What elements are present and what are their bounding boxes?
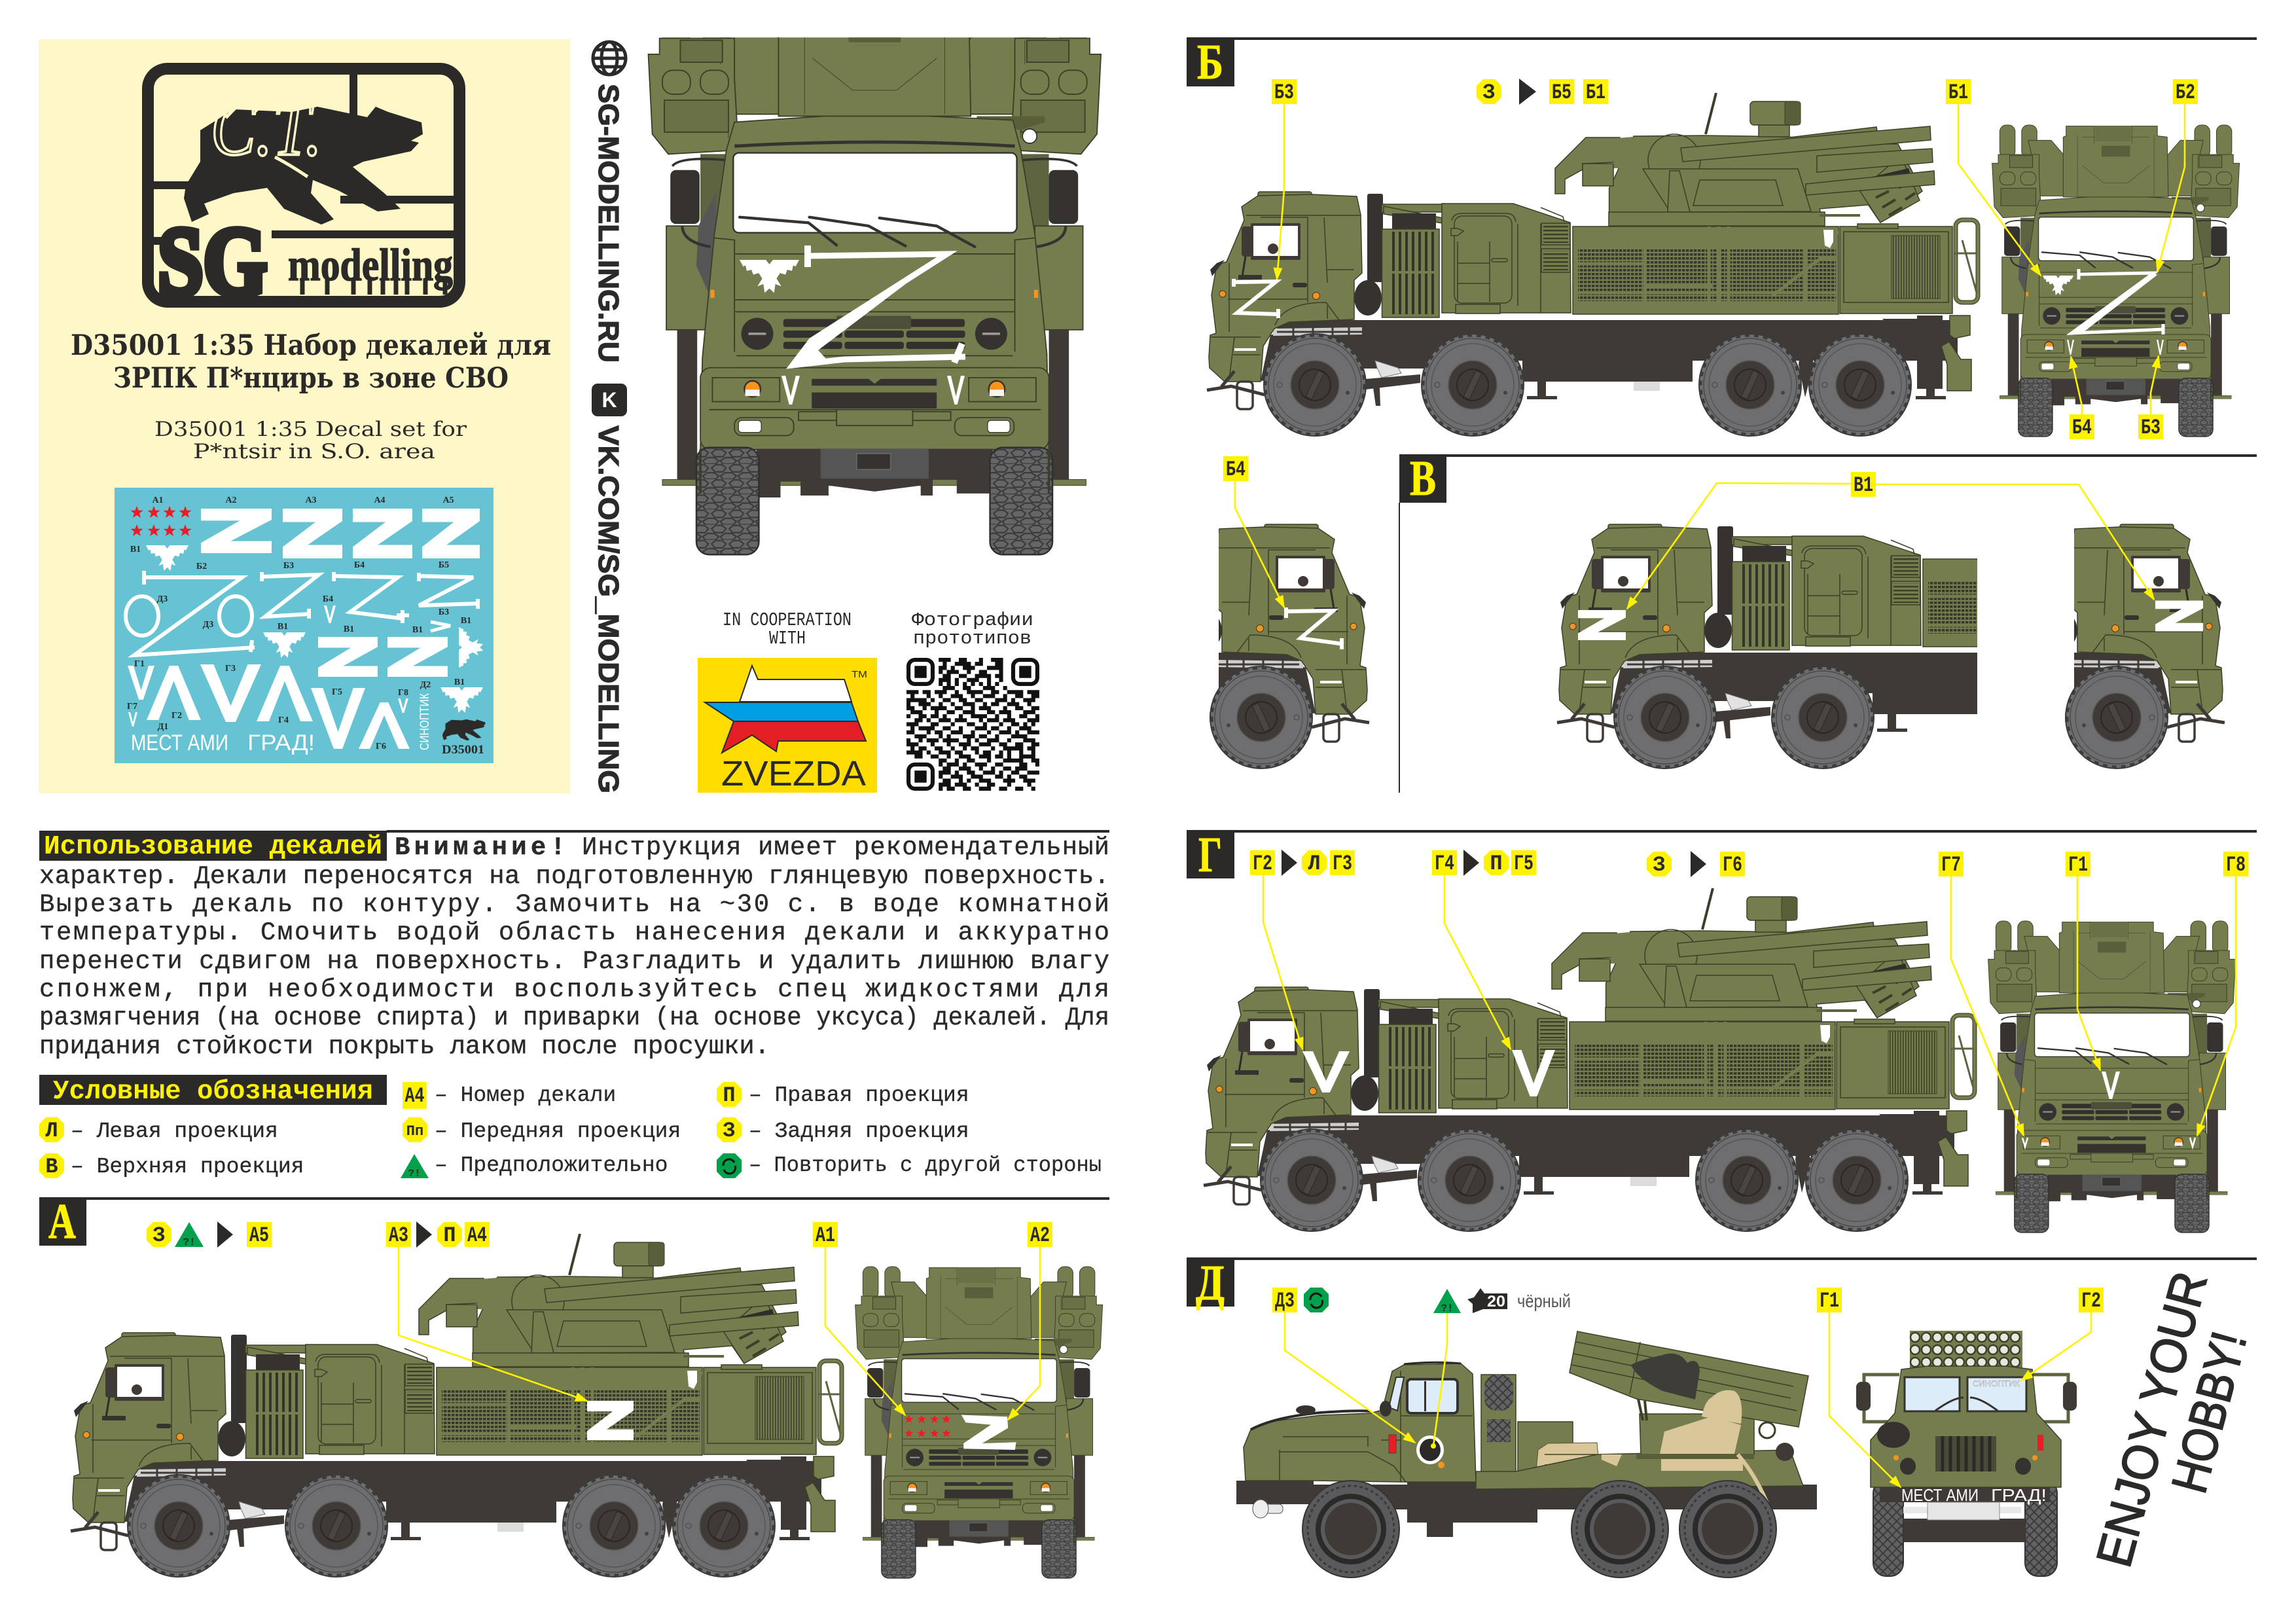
section letter A: А — [48, 1194, 76, 1249]
illustration: cab with В1 decal — [2065, 524, 2225, 769]
callout: A3 arrow — [399, 1247, 587, 1401]
illustration: truck with В1 decal — [1556, 524, 1977, 769]
section letter Б — [1187, 35, 1234, 90]
label: Г1: Г1 — [2068, 853, 2088, 877]
decal sheet: Г8 — [398, 688, 408, 698]
section letter Г — [1187, 827, 1234, 882]
legend item: left view: Л — [45, 1119, 58, 1143]
text block: instructions: характер. Декали переносятся на подготовленную глянцевую поверхность. — [39, 862, 1109, 891]
panel: section B (В) — [1399, 454, 2257, 793]
section letter Г: Г — [1198, 827, 1222, 882]
heading: English title — [154, 418, 467, 463]
label: Б4: Б4 — [1226, 458, 1246, 482]
label: Б2: Б2 — [2176, 81, 2195, 105]
illustration: side view — [1207, 93, 1978, 436]
text block: instructions: Внимание! — [395, 833, 565, 862]
decal sheet: В1 — [344, 624, 354, 634]
label: Г2 Л Г3: Г2 — [1253, 852, 1272, 876]
decal sheet: Б5 — [439, 560, 449, 570]
icon: VK: K — [601, 388, 617, 412]
callout: Б2 arrow — [2157, 104, 2185, 272]
text: cooperation — [723, 609, 852, 649]
text: prototype photos: прототипов — [913, 628, 1031, 649]
legend item: left view: – Левая проекция — [71, 1119, 278, 1144]
decal sheet: Г6 — [376, 742, 386, 751]
label: rear Г6 — [1647, 851, 1745, 877]
label: A3 A4: А4 — [467, 1223, 487, 1248]
text: enjoy your hobby: ENJOY YOUR — [2086, 1266, 2218, 1572]
label: presumed colour: чёрный — [1517, 1291, 1571, 1311]
label: Б4 lower: Б4 — [2072, 416, 2092, 440]
heading: Russian title — [71, 329, 551, 395]
legend item: right view: П — [723, 1083, 736, 1108]
callout: Г2 arrow — [2021, 1312, 2091, 1380]
callout: presumed black decal — [1433, 1313, 1447, 1446]
label: Г7: Г7 — [1941, 853, 1961, 877]
illustration: Grad front view: СИНОПТИК — [1973, 1379, 2020, 1388]
legend item: top view: – Верхняя проекция — [71, 1155, 304, 1179]
panel: decal usage instructions — [39, 830, 1109, 1061]
decal sheet: Д1 — [158, 722, 168, 732]
panel: section A — [39, 1194, 1109, 1578]
label: rear A5: ?! — [183, 1236, 196, 1248]
text block: instructions: перенести сдвигом на поверхность. Разгладить и удалить лишнюю влагу — [39, 947, 1109, 976]
label: rear Б5 Б1: Б5 — [1552, 81, 1571, 105]
illustration: side view — [71, 1234, 842, 1577]
callout: Г4 arrow — [1444, 875, 1511, 1049]
text: cooperation: WITH — [769, 628, 806, 649]
decal sheet: В1 — [461, 616, 471, 626]
heading: English title: P*ntsir in S.O. area — [193, 440, 435, 463]
label: rear A5 — [147, 1221, 272, 1248]
illustration: Grad front view: МЕСТ АМИ — [1901, 1485, 1979, 1505]
heading: legend: Условные обозначения — [53, 1077, 373, 1107]
decal sheet: Д2 — [420, 680, 431, 690]
label: rear A5: А5 — [249, 1223, 269, 1248]
text: prototype photos — [912, 609, 1033, 649]
label: Г2: Г2 — [2081, 1289, 2101, 1313]
label: Г8: Г8 — [2226, 853, 2246, 877]
label: presumed colour: 20 — [1487, 1293, 1505, 1310]
illustration: front view — [855, 1267, 1103, 1578]
decal sheet: D35001 — [442, 743, 484, 757]
decal sheet: В1 — [278, 622, 288, 632]
illustration: cab with Б4 decal — [1210, 524, 1369, 769]
callout: Г2 arrow — [1263, 875, 1302, 1049]
text block: instructions: Инструкция имеет рекомендательный — [582, 833, 1109, 862]
label: Г2 Л Г3: Г3 — [1333, 852, 1352, 876]
decal sheet: СИНОПТИК — [418, 693, 432, 750]
callout: Б3 lower arrow — [2151, 356, 2159, 414]
illustration: front view — [1988, 921, 2236, 1233]
legend item: front view: Пп — [406, 1123, 423, 1140]
heading: usage: Использование декалей — [44, 832, 382, 862]
icon: globe — [593, 42, 626, 75]
label: rear Г6: З — [1653, 853, 1666, 877]
decal sheet: Г2 — [171, 711, 182, 721]
label: Б3 lower: Б3 — [2141, 416, 2161, 440]
icon: VK — [592, 384, 627, 416]
decal sheet: Б3 — [283, 561, 294, 571]
decal sheet: ГРАД! — [247, 731, 315, 755]
illustration: Grad front view: ГРАД! — [1991, 1485, 2047, 1505]
label: Д3 repeat: Д3 — [1275, 1289, 1295, 1313]
callout: Б3 arrow — [1277, 104, 1284, 280]
label: presumed colour — [1433, 1288, 1571, 1314]
callout: Б4 arrow — [2071, 357, 2082, 414]
callout: Г1 arrow — [1829, 1312, 1901, 1487]
label: rear Б5 Б1 — [1477, 79, 1608, 105]
illustration: Grad side view — [1236, 1331, 1817, 1578]
text: website: SG-MODELLING.RU — [592, 84, 624, 363]
illustration: big front view of vehicle — [649, 0, 1101, 554]
label: A1: А1 — [816, 1223, 835, 1248]
label: A3 A4: П — [443, 1223, 456, 1248]
decal sheet: В1 — [130, 545, 141, 554]
label: Г2 Л Г3: Л — [1308, 852, 1321, 876]
label: A3 A4 — [386, 1221, 490, 1248]
legend item: front view: – Передняя проекция — [435, 1119, 681, 1144]
decal sheet: Г4 — [278, 715, 289, 725]
text block: instructions: температуры. Смочить водой область нанесения декали и аккуратно — [39, 918, 1109, 947]
label: Г4 П Г5: П — [1490, 852, 1503, 876]
legend item: presumably: ?! — [408, 1168, 421, 1180]
logo: SG modelling sprue frame with bear: SG — [158, 208, 267, 316]
panel: title card — [39, 39, 570, 793]
decal sheet: Г1 — [134, 659, 145, 669]
legend item: top view: В — [45, 1155, 58, 1179]
decal sheet — [115, 488, 493, 763]
logo: Zvezda: ZVEZDA — [721, 754, 866, 793]
text: VK address: VK.COM/SG_MODELLING — [592, 425, 624, 793]
logo: Zvezda — [698, 658, 877, 793]
decal sheet: Б2 — [196, 562, 207, 571]
text block: instructions: спонжем, при необходимости воспользуйтесь спец жидкостями для — [39, 975, 1109, 1004]
section letter Д: Д — [1196, 1255, 1225, 1310]
callout: Б4 arrow — [1235, 480, 1284, 607]
callout: Г8 arrow — [2197, 876, 2236, 1136]
callout: dot on decal — [1431, 1443, 1436, 1449]
label: Г4 П Г5: Г4 — [1435, 852, 1454, 876]
decal sheet: Б4 — [323, 594, 333, 604]
legend item: right view: – Правая проекция — [749, 1083, 969, 1108]
panel: section Д — [1187, 1255, 2257, 1578]
section letter Б: Б — [1197, 35, 1223, 90]
logo: SG modelling sprue frame with bear: C.T. — [211, 82, 322, 173]
heading: Russian title: ЗРПК П*нцирь в зоне СВО — [113, 362, 509, 395]
label: Г4 П Г5 — [1432, 850, 1536, 876]
text block: instructions: размягчения (на основе спирта) и приварки (на основе уксуса) декалей. Для — [39, 1003, 1109, 1032]
label: В1: В1 — [1854, 473, 1873, 497]
illustration: side view — [1204, 888, 1975, 1231]
label: A2: А2 — [1030, 1223, 1050, 1248]
heading: English title: D35001 1:35 Decal set for — [154, 418, 467, 441]
decal sheet: Б4 — [354, 560, 365, 570]
text: enjoy your hobby: HOBBY! — [2161, 1326, 2257, 1498]
label: Г4 П Г5: Г5 — [1514, 852, 1534, 876]
legend item: rear view: З — [723, 1119, 736, 1143]
callout: Д3 arrow — [1285, 1312, 1415, 1443]
decal sheet: Д3 — [203, 620, 213, 630]
decal sheet: Г3 — [225, 664, 236, 674]
label: Б3: Б3 — [1274, 81, 1294, 105]
callout: Г1 arrow — [2077, 876, 2100, 1070]
decal sheet: А4 — [374, 496, 386, 505]
callout: Г7 arrow — [1951, 876, 2024, 1136]
decal sheet: Д3 — [157, 594, 168, 604]
text: cooperation: IN COOPERATION — [723, 609, 852, 631]
heading: Russian title: D35001 1:35 Набор декалей для — [71, 329, 551, 362]
decal: big Z — [793, 245, 965, 366]
label: rear Г6: Г6 — [1723, 853, 1742, 877]
decal sheet: А2 — [225, 496, 237, 505]
decal sheet: А1 — [152, 496, 164, 505]
decal sheet: В1 — [412, 625, 423, 635]
legend item: repeat on other side: – Повторить с другой стороны — [749, 1153, 1102, 1178]
callout: A2 arrow — [1008, 1247, 1040, 1420]
label: Д3 repeat — [1272, 1288, 1329, 1313]
section letter В: В — [1410, 451, 1436, 506]
text block: instructions — [39, 833, 1109, 1061]
legend item: decal number: А4 — [404, 1084, 424, 1108]
decal sheet: Б3 — [439, 607, 449, 617]
label: Г2 Л Г3 — [1250, 850, 1355, 876]
label: rear A5: З — [152, 1223, 166, 1248]
callout: A1 arrow — [825, 1247, 905, 1415]
panel: legend — [39, 1075, 1102, 1180]
label: Б1: Б1 — [1948, 81, 1968, 105]
decal sheet: Г5 — [332, 687, 342, 697]
label: A3 A4: А3 — [389, 1223, 408, 1248]
decal sheet: А3 — [305, 496, 317, 505]
label: rear Б5 Б1: Б1 — [1586, 81, 1605, 105]
callout: Б1 arrow — [1958, 104, 2041, 276]
legend item: rear view: – Задняя проекция — [749, 1119, 969, 1144]
logo: Zvezda: TM — [852, 669, 867, 680]
label: Г1: Г1 — [1820, 1289, 1839, 1313]
text block: instructions: Вырезать декаль по контуру. Замочить на ~30 с. в воде комнатной — [39, 890, 1109, 919]
legend item: presumably: – Предположительно — [435, 1153, 668, 1178]
text: prototype photos: Фотографии — [912, 609, 1033, 631]
decal sheet: А5 — [442, 496, 454, 505]
text block: instructions: придания стойкости покрыть лаком после просушки. — [39, 1032, 770, 1061]
panel: section Г — [1187, 827, 2257, 1233]
logo: SG modelling sprue frame with bear — [148, 69, 459, 316]
illustration: Grad front view — [1856, 1331, 2077, 1576]
decal sheet: МЕСТ АМИ — [131, 731, 228, 755]
label: presumed colour: ?! — [1441, 1303, 1454, 1314]
panel: section B (Б) — [598, 35, 2257, 768]
logo: SG modelling sprue frame with bear: modelling — [288, 240, 453, 291]
decal sheet: В1 — [454, 677, 465, 687]
label: rear Б5 Б1: З — [1482, 81, 1496, 105]
QR code — [906, 660, 1039, 789]
decal sheet: Г7 — [127, 702, 137, 712]
callout: В1 left — [1627, 483, 1851, 609]
legend item: decal number: – Номер декали — [435, 1083, 616, 1108]
illustration: front view — [1992, 125, 2240, 437]
callout: В1 right — [1875, 484, 2154, 600]
